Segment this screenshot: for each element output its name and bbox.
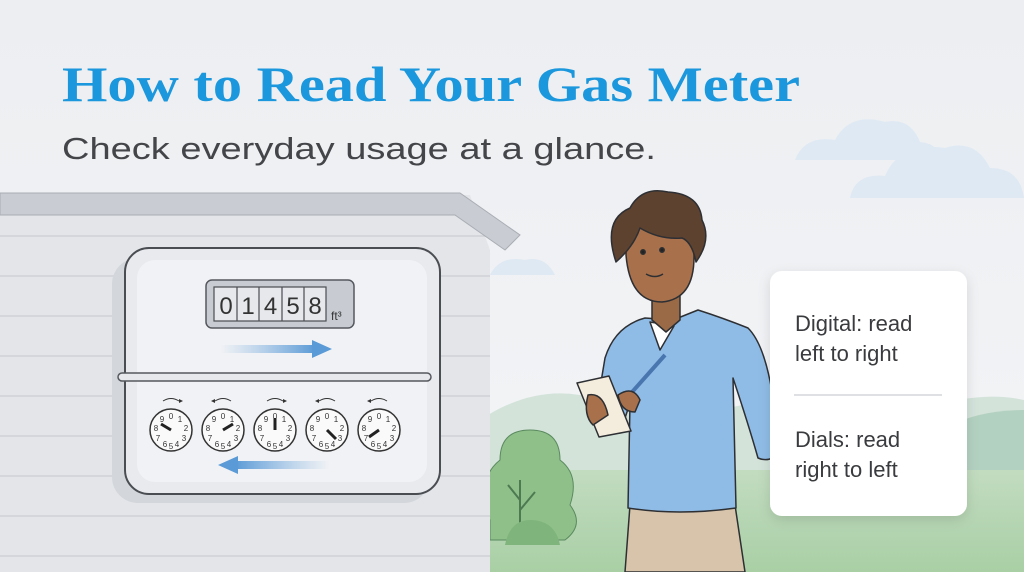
digital counter: 0 [219, 293, 233, 320]
dials: 0 [221, 412, 226, 421]
dials: 1 [178, 415, 183, 424]
notepad [577, 376, 631, 437]
face [626, 217, 694, 302]
arrow right [220, 340, 332, 358]
pants [625, 505, 745, 572]
dials: 7 [208, 434, 213, 443]
dials: 9 [316, 415, 321, 424]
dials: 5 [273, 442, 278, 451]
dials: 1 [386, 415, 391, 424]
person [577, 191, 778, 572]
dials: 0 [325, 412, 330, 421]
neck [652, 292, 680, 332]
dials: 7 [156, 434, 161, 443]
pipe [118, 373, 431, 381]
dials: 5 [221, 442, 226, 451]
gas meter [112, 248, 440, 503]
dials: 6 [319, 440, 324, 449]
dials: 1 [282, 415, 287, 424]
card text: dials: right to left [795, 457, 898, 482]
subtitle: Check everyday usage at a glance. [62, 131, 656, 166]
title: How to Read Your Gas Meter [62, 56, 800, 112]
dials: 8 [154, 424, 159, 433]
hair [611, 191, 706, 262]
card text: dials: Dials: read [795, 427, 900, 452]
dials: 2 [288, 424, 293, 433]
dials: 6 [163, 440, 168, 449]
dials: 6 [371, 440, 376, 449]
dials: 3 [182, 434, 187, 443]
shirt body [595, 310, 778, 512]
dials: 2 [340, 424, 345, 433]
dials: 4 [227, 440, 232, 449]
dials: 9 [212, 415, 217, 424]
dials: 8 [362, 424, 367, 433]
dials: 0 [377, 412, 382, 421]
dials: 2 [184, 424, 189, 433]
dials: 4 [331, 440, 336, 449]
dials: 9 [264, 415, 269, 424]
dials: 4 [383, 440, 388, 449]
digital counter: 4 [264, 293, 277, 320]
dials: 1 [230, 415, 235, 424]
dials: 3 [338, 434, 343, 443]
arrow left [218, 456, 330, 474]
dials: 1 [334, 415, 339, 424]
dials: 5 [325, 442, 330, 451]
dials: 7 [260, 434, 265, 443]
hills and ground [480, 387, 1024, 572]
dials: 3 [390, 434, 395, 443]
digital counter: 8 [308, 293, 322, 320]
dials: 0 [273, 412, 278, 421]
digital counter [206, 280, 354, 328]
dials: 6 [215, 440, 220, 449]
card text: digital: Digital: read [795, 311, 912, 336]
dials: 4 [279, 440, 284, 449]
clouds [490, 119, 1024, 275]
dials: 8 [258, 424, 263, 433]
dials: 2 [236, 424, 241, 433]
dials: 4 [175, 440, 180, 449]
callout card [770, 271, 967, 516]
dials: 0 [169, 412, 174, 421]
dials: 2 [392, 424, 397, 433]
dials: 9 [160, 415, 165, 424]
digital counter: 1 [241, 293, 255, 320]
dials [150, 398, 400, 451]
dials: 8 [206, 424, 211, 433]
bush [484, 430, 576, 545]
digital counter: ft³ [331, 309, 342, 323]
digital counter: 5 [286, 293, 300, 320]
dials: 7 [312, 434, 317, 443]
dials: 6 [267, 440, 272, 449]
dials: 3 [286, 434, 291, 443]
house wall [0, 193, 520, 572]
dials: 7 [364, 434, 369, 443]
dials: 5 [377, 442, 382, 451]
dials: 3 [234, 434, 239, 443]
dials: 5 [169, 442, 174, 451]
dials: 8 [310, 424, 315, 433]
dials: 9 [368, 415, 373, 424]
card text: digital: left to right [795, 341, 898, 366]
